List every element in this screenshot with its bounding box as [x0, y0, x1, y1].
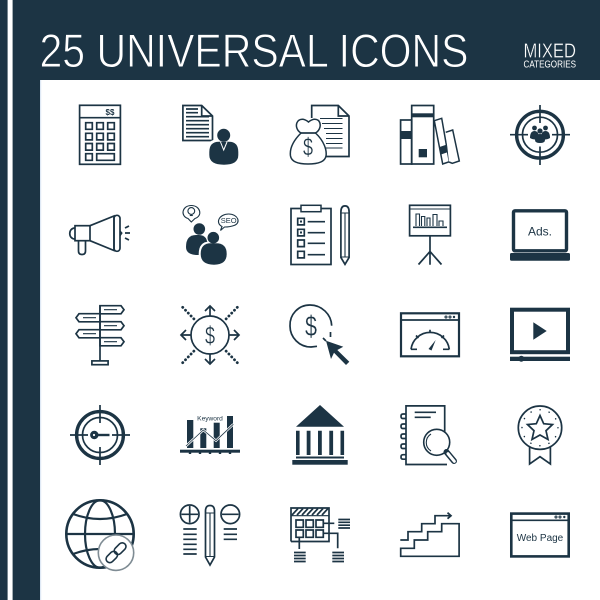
icon: laptop with Ads: Ads.: [528, 224, 552, 238]
icon: pay per click cursor: $: [305, 311, 317, 343]
icon: dollar with arrows: $: [205, 322, 215, 350]
icon: calculator: [80, 105, 120, 164]
icon: document and businessman: [183, 106, 241, 167]
subtitle: mixed: MIXED: [524, 40, 576, 62]
title: 25 UNIVERSAL ICONS: [40, 24, 468, 77]
icon: money bag and document: [290, 106, 349, 164]
icon: team with SEO bubbles: [183, 206, 238, 266]
icon: target with key: [70, 405, 130, 465]
icon: speedometer window: [400, 313, 460, 356]
icon: bank building: [292, 405, 348, 465]
icon: dollar with arrows: [181, 306, 239, 364]
icon: medal with star: [518, 406, 562, 464]
icon: pay per click cursor: [290, 305, 349, 365]
icon: stairs with arrow: [400, 513, 459, 556]
icon: globe with link: [66, 500, 134, 570]
icon: target with team: [510, 105, 570, 165]
icon: money bag and document: $: [303, 134, 313, 162]
icon: video player: [510, 310, 570, 362]
icon: laptop with Ads: [510, 211, 570, 261]
icon: megaphone: [70, 215, 130, 254]
icon: signpost: [76, 305, 124, 365]
icon: calendar planning: [291, 508, 350, 562]
icon: keyword bar chart: Keyword: [197, 416, 223, 422]
icon: books: [401, 106, 459, 164]
icon: pros and cons pencil: [180, 505, 240, 565]
icon: web page window: [510, 514, 570, 556]
icon: keyword bar chart: [180, 416, 240, 454]
icon: presentation board: [410, 205, 450, 265]
icon: web page window: Web Page: [517, 533, 564, 544]
subtitle: categories: CATEGORIES: [524, 60, 576, 71]
icon: notebook with magnifier: [401, 406, 454, 464]
icon: team with SEO bubbles: SEO: [221, 216, 237, 225]
icon: checklist and pencil: [291, 205, 349, 264]
icon: calculator: $$: [106, 108, 115, 117]
